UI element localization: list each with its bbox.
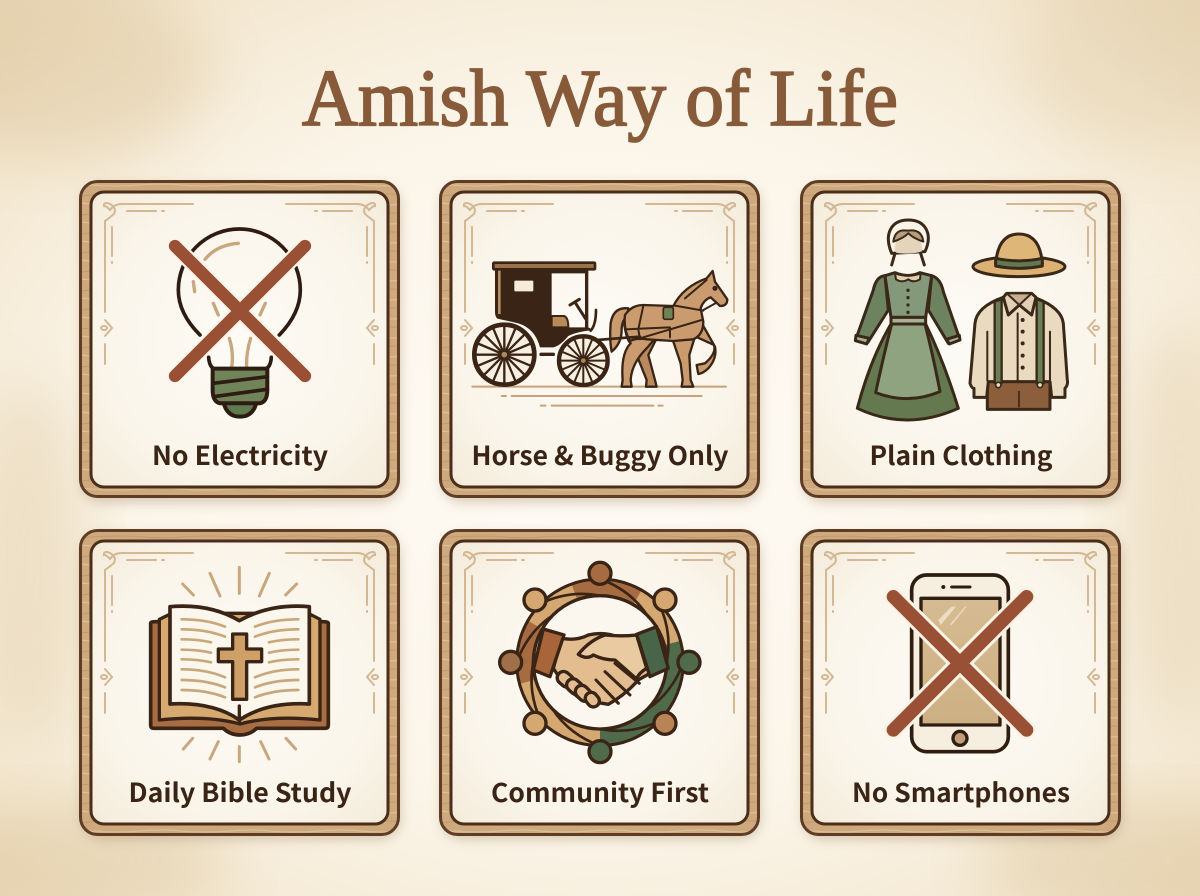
label: Plain Clothing: Plain Clothing	[870, 436, 1053, 473]
icon: crossed-out smartphone	[893, 575, 1027, 752]
icon: horse and buggy	[472, 263, 727, 406]
handshake	[533, 627, 668, 709]
panel: Plain Clothing	[802, 182, 1121, 502]
panel: Community First	[440, 530, 760, 839]
dress	[857, 276, 888, 343]
label: Daily Bible Study: Daily Bible Study	[128, 773, 352, 810]
panel: Horse & Buggy Only	[440, 182, 760, 502]
bonnet	[888, 220, 928, 253]
icon: open bible with cross	[151, 567, 328, 762]
panel: No Smartphones	[802, 530, 1121, 839]
icon: plain dress, hat and shirt	[855, 220, 1068, 420]
hat	[973, 257, 1065, 277]
icon: crossed-out light bulb	[175, 229, 305, 417]
wheels	[474, 325, 608, 385]
panel: No Electricity	[80, 182, 400, 502]
label: Horse & Buggy Only: Horse & Buggy Only	[472, 436, 729, 473]
panel: Daily Bible Study	[80, 530, 400, 839]
icon: handshake in a community ring	[500, 562, 700, 763]
label: No Electricity: No Electricity	[152, 436, 328, 473]
label: Community First: Community First	[491, 773, 709, 810]
horse	[597, 271, 727, 387]
buggy body	[495, 268, 593, 347]
title: Amish Way of Life	[302, 55, 898, 143]
ground lines	[472, 387, 726, 406]
shirt	[987, 382, 1050, 409]
label: No Smartphones: No Smartphones	[852, 773, 1070, 810]
